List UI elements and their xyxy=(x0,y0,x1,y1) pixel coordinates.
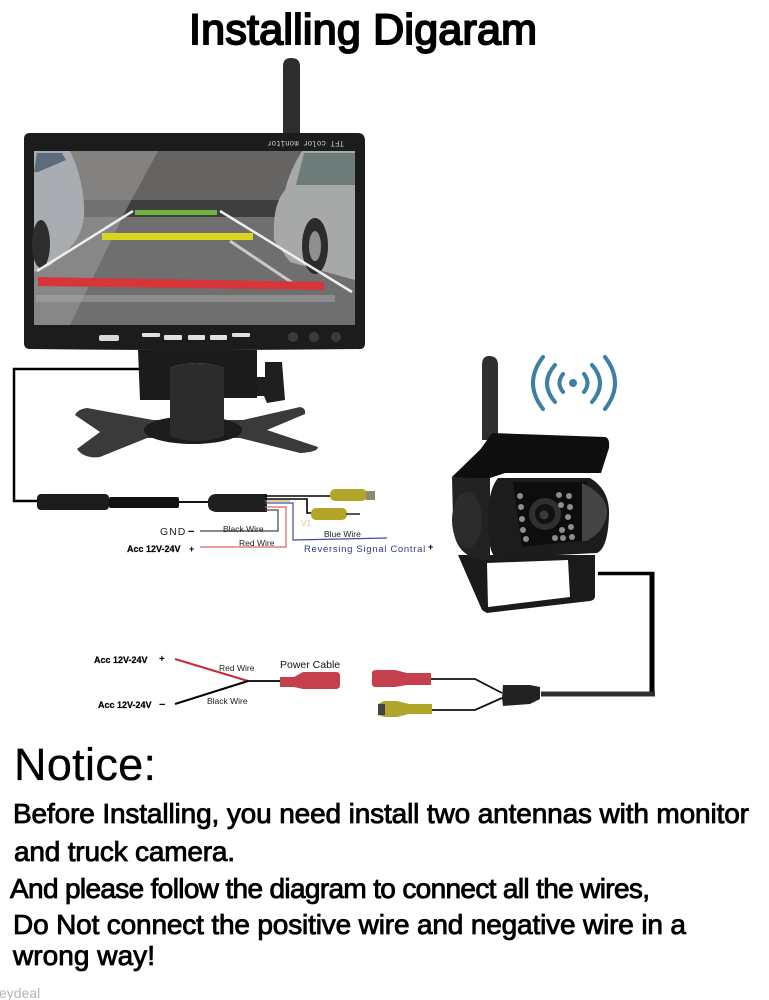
power labels: Acc 12V-24V xyxy=(94,655,148,665)
stand foot xyxy=(144,416,242,444)
stand neck xyxy=(170,363,224,441)
notice text: And please follow the diagram to connect all the wires, xyxy=(10,873,650,904)
camera bracket xyxy=(458,555,595,613)
stand base plate xyxy=(75,407,318,457)
glare xyxy=(34,151,158,325)
wire: monitor to connector xyxy=(14,369,140,501)
signal icon xyxy=(533,357,615,409)
wiring labels: Reversing Signal Contral xyxy=(304,544,426,555)
power cable xyxy=(175,659,340,704)
monitor antenna xyxy=(283,58,300,134)
yellow RCA connectors xyxy=(265,496,332,513)
green guide xyxy=(135,210,217,215)
parked car right xyxy=(274,151,355,280)
power labels xyxy=(94,654,340,711)
truck camera xyxy=(452,356,609,613)
notice text: wrong way! xyxy=(12,940,155,971)
yellow connector xyxy=(378,701,432,717)
wiring labels: Black Wire xyxy=(223,524,264,534)
notice text: Do Not connect the positive wire and negative wire in a xyxy=(13,909,686,940)
monitor label: TFT color monitor xyxy=(267,138,344,147)
wiring labels: + xyxy=(189,544,194,554)
notice heading: Notice: xyxy=(14,739,156,790)
power labels: − xyxy=(159,699,165,711)
monitor xyxy=(24,58,365,457)
monitor stand xyxy=(75,350,318,457)
title: Installing Digaram xyxy=(189,6,537,54)
camera antenna xyxy=(482,356,498,440)
wiring labels: GND xyxy=(160,526,186,538)
yellow guide xyxy=(102,233,253,240)
wiring labels: Red Wire xyxy=(239,538,275,548)
notice text: and truck camera. xyxy=(14,836,235,867)
stand knob xyxy=(257,362,285,403)
camera IR LEDs xyxy=(517,492,575,542)
stand bracket xyxy=(138,350,257,400)
red guide xyxy=(38,277,324,290)
power labels: + xyxy=(159,654,165,665)
monitor body xyxy=(24,133,365,350)
junction box xyxy=(502,685,540,706)
power labels: Power Cable xyxy=(280,659,340,671)
wiring labels xyxy=(127,519,433,555)
guide lines xyxy=(37,211,352,292)
wiring labels: − xyxy=(188,526,194,538)
coloured wires xyxy=(200,510,278,531)
screen xyxy=(32,151,355,325)
camera cable assembly xyxy=(372,670,540,717)
red connector xyxy=(372,670,431,687)
wiring labels: Blue Wire xyxy=(324,529,361,539)
monitor cable assembly xyxy=(37,489,387,547)
notice text xyxy=(10,798,749,971)
camera lens xyxy=(529,498,561,530)
power labels: Black Wire xyxy=(207,696,248,706)
camera body xyxy=(488,478,609,558)
power labels: Acc 12V-24V xyxy=(98,700,152,710)
camera side mount xyxy=(452,440,490,560)
power plug xyxy=(280,672,340,689)
wire: camera to junction xyxy=(541,572,655,694)
parked car left xyxy=(34,151,84,272)
wiring labels: + xyxy=(428,542,433,552)
power labels: Red Wire xyxy=(219,663,255,673)
wiring labels: V1 xyxy=(301,519,311,528)
monitor controls xyxy=(99,332,341,342)
notice text: Before Installing, you need install two antennas with monitor xyxy=(13,798,749,829)
camera sun shield xyxy=(452,433,609,478)
wiring labels: Acc 12V-24V xyxy=(127,544,181,554)
